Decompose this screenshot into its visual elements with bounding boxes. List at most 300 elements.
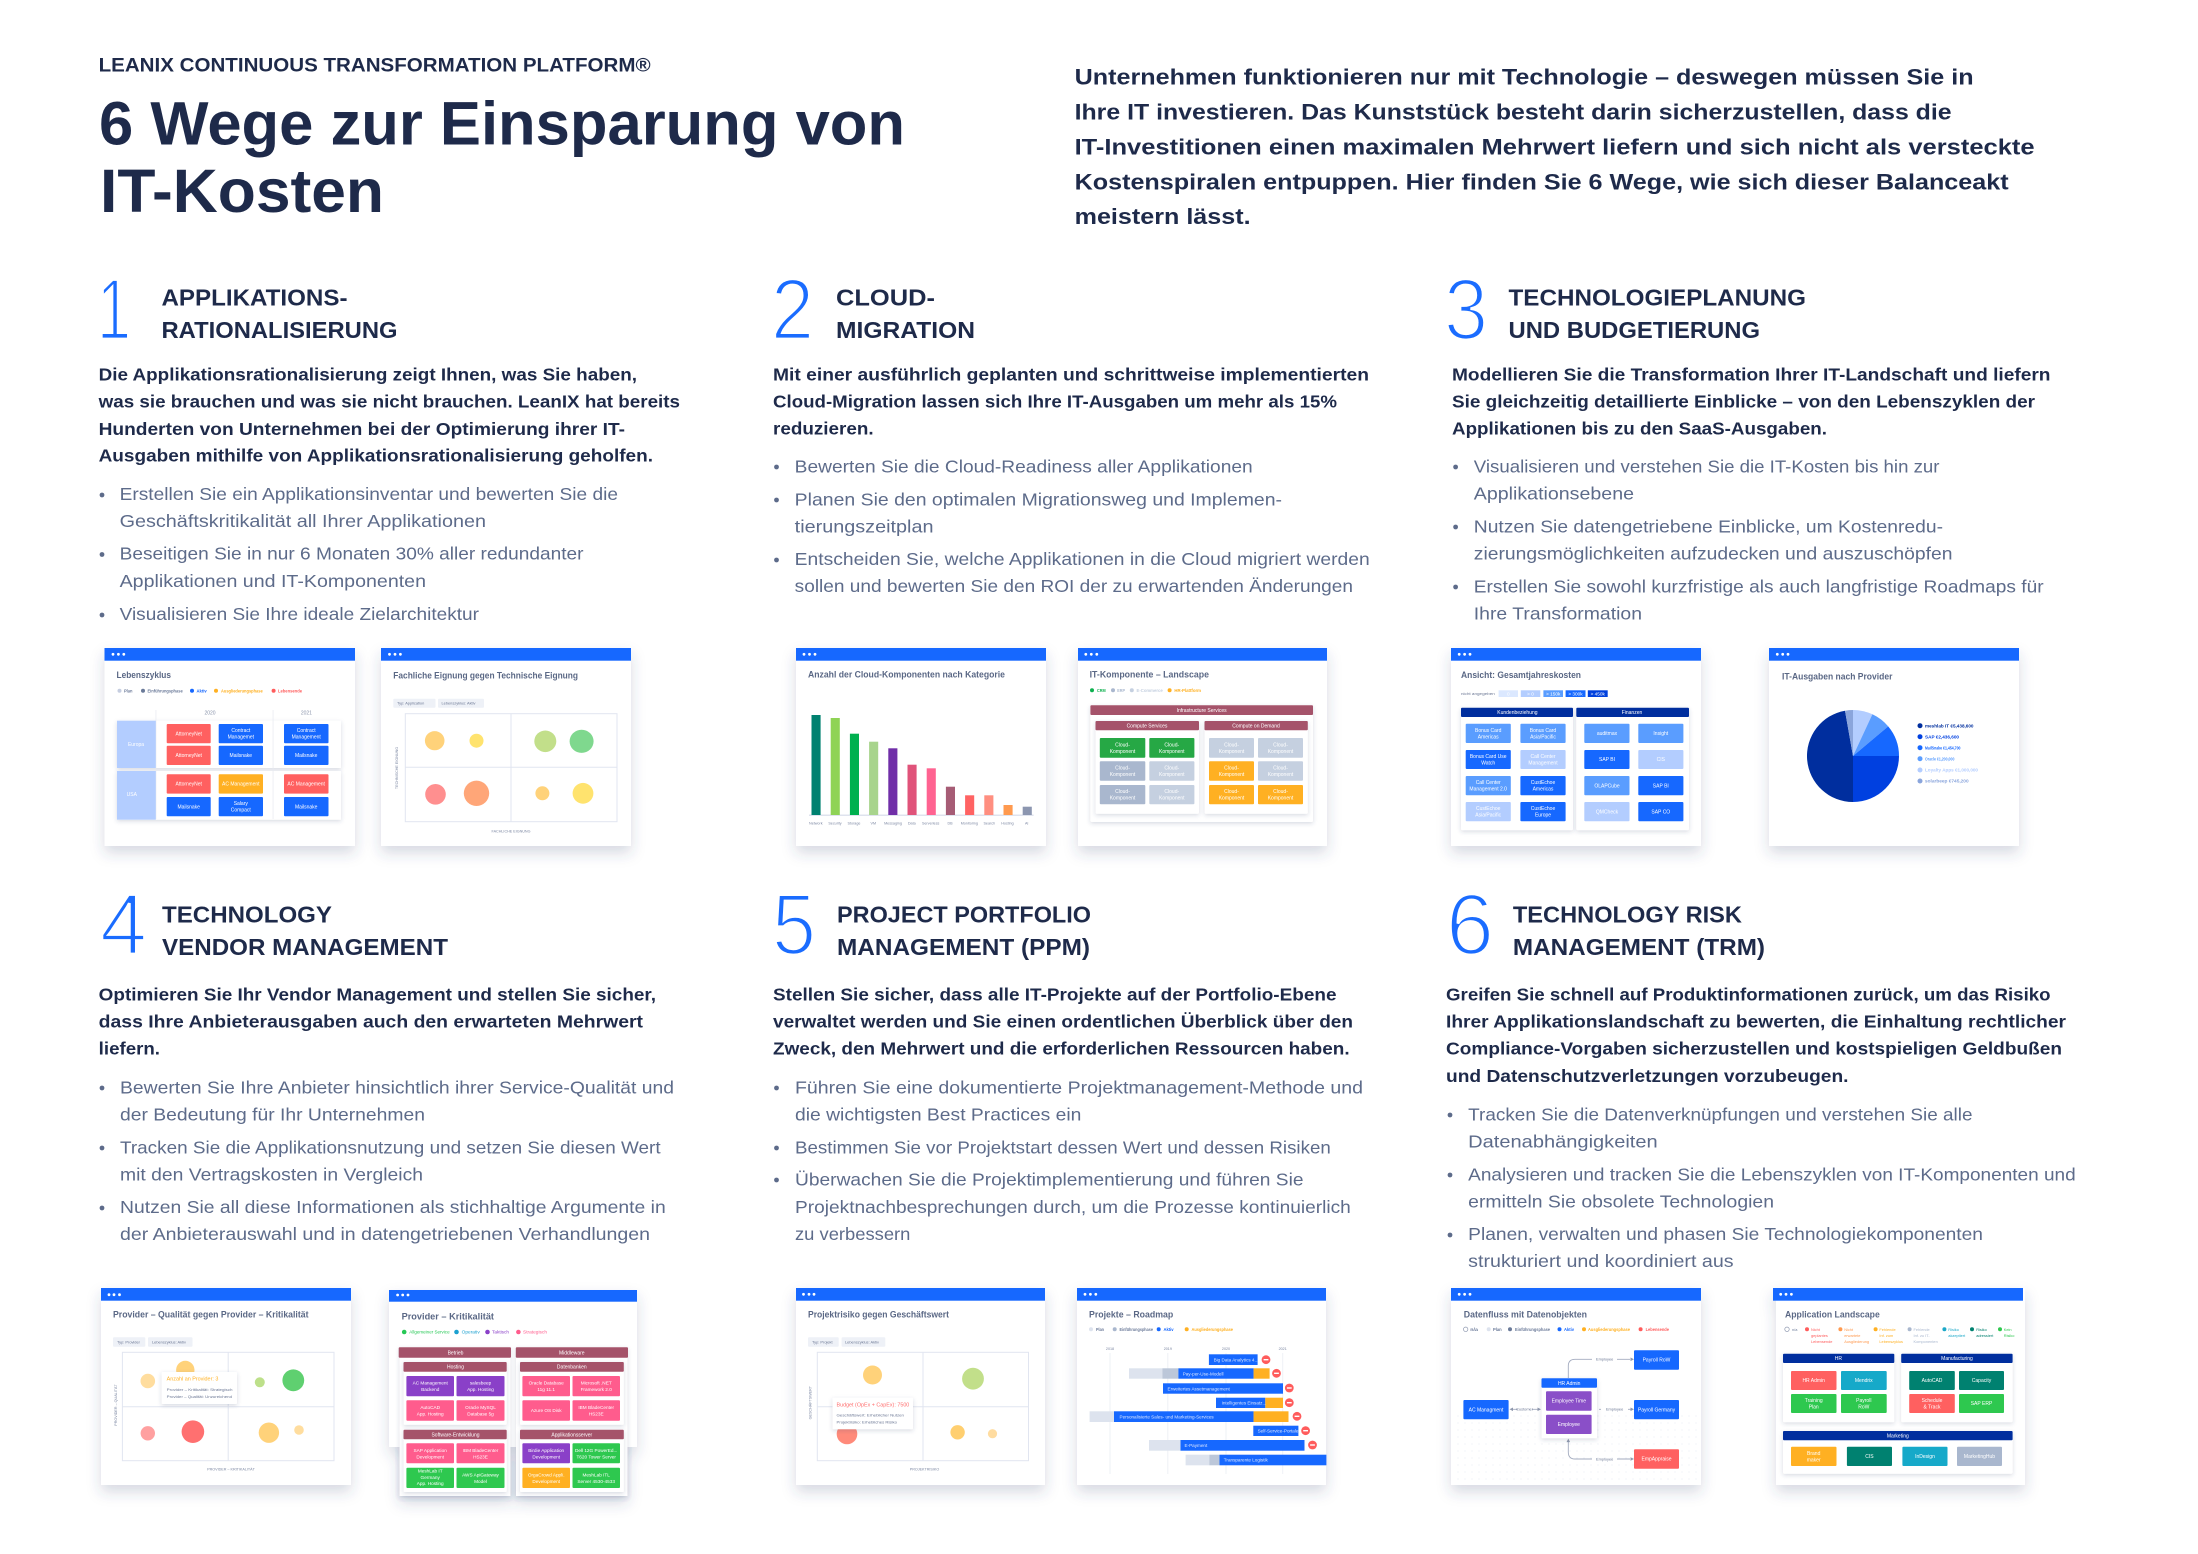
heading 1 [162,284,398,343]
panel: HR: Training [1805,1398,1823,1404]
legend: Risiko [1948,1327,1959,1332]
legend: Lebensende [278,688,302,693]
bullet list 2: Planen Sie den optimalen Migrationsweg und Implemen- [795,490,1282,510]
legend: geplantes [1811,1333,1828,1338]
dotted backdrop [1455,1415,1697,1481]
card: Projekte Roadmap [1077,1288,1326,1485]
card: Gesamtjahreskosten [1451,648,1701,846]
lifecycle table: 2021 [301,711,312,717]
panel: Betrieb: Betrieb [448,1350,464,1356]
lifecycle table: AttorneyNet [175,782,203,788]
card: Fachliche Eignung [381,648,631,846]
cost legend: > 150k [1546,691,1561,696]
panel: Manufacturing: SAP ERP [1971,1401,1993,1407]
lifecycle table: AC Management [287,782,326,788]
heading 4 [162,901,448,960]
gantt chart: Big Data Analytics 4... [1214,1358,1258,1362]
tooltip [162,1372,237,1404]
number 1: 1 [97,262,131,358]
legend [1089,1327,1233,1332]
data flow diagram: Customer [1516,1407,1534,1412]
number 4: 4 [100,877,147,973]
gantt chart: 2021 [1279,1347,1287,1351]
capability map: Cloud- [1224,789,1239,795]
capability map: Komponent [1268,796,1294,802]
capability map: Komponent [1219,796,1245,802]
panel: Middleware: Azure OS Disk [531,1408,562,1413]
card title: Provider – Qualität gegen Provider – Kritikalität [113,1309,309,1320]
legend: Komponenten [1914,1339,1938,1344]
data flow diagram: Payroll RoW [1643,1358,1671,1364]
data flow diagram: AC Managment [1469,1407,1504,1413]
panel: Betrieb: AutoCAD [420,1405,441,1410]
data flow diagram: Employee [1596,1357,1613,1362]
tooltip: Provider – Qualität: Unzureichend [167,1394,232,1399]
heading 3: UND BUDGETIERUNG [1508,317,1760,343]
lead text 3 [1452,364,2050,439]
panel: Betrieb [399,1347,511,1496]
bullet list 3: Nutzen Sie datengetriebene Einblicke, um Kostenredu- [1474,516,1943,536]
legend: Lebensende [1646,1327,1669,1332]
legend: Plan [1493,1327,1502,1332]
gantt chart: 2020 [1222,1347,1230,1351]
lead text 6: Ihrer Applikationslandschaft zu bewerten, die Einhaltung rechtlicher [1446,1011,2066,1031]
heat map: auditmax [1597,731,1618,737]
legend: Ausgliederung [1844,1339,1869,1344]
bullet list 6: Tracken Sie die Datenverknüpfungen und verstehen Sie alle [1468,1104,1972,1124]
panel: Middleware: Datenbanken [557,1365,587,1371]
bullet list 2: tierungszeitplan [795,517,934,537]
pie chart [1807,710,1899,802]
bullet list 5: die wichtigsten Best Practices ein [795,1104,1081,1124]
lifecycle table: Mailsnake [230,753,252,759]
panel: HR: Mendrix [1855,1378,1873,1384]
lifecycle table: 2020 [204,711,216,717]
bar chart: Hosting [1001,821,1014,825]
lead text 2: Cloud-Migration lassen sich Ihre IT-Ausgaben um mehr als 15% [773,392,1337,412]
panel: Betrieb: AC Management [413,1380,448,1386]
card: Provider Qualität gegen Kritikalität [101,1288,351,1485]
card title: Application Landscape [1785,1309,1880,1320]
heat map: Management 2.0 [1469,787,1507,793]
legend: Strategisch [523,1330,547,1335]
pie legend: solarbeep €745,200 [1925,779,1969,784]
bar chart: Network [809,821,823,825]
capability map: Cloud- [1273,766,1288,772]
panel: Middleware: Oracle Database [529,1380,564,1386]
panel: Marketing: Marketing [1887,1434,1909,1440]
panel: Middleware: T620 Tower Server [576,1454,616,1459]
bullet list 5: Bestimmen Sie vor Projektstart dessen Wert und dessen Risiken [795,1137,1331,1157]
legend: E-Commerce [1136,688,1163,693]
capability map: Cloud- [1115,789,1130,795]
heat map: Watch [1481,760,1495,766]
heat map: Americas [1533,787,1554,793]
bubble matrix [114,1352,334,1471]
bullet list 4: Tracken Sie die Applikationsnutzung und setzen Sie diesen Wert [120,1137,661,1157]
data flow diagram: Employee Time [1552,1399,1586,1405]
heading 4: VENDOR MANAGEMENT [162,934,448,960]
lifecycle table: AttorneyNet [175,753,203,759]
tooltip: Anzahl an Provider: 3 [167,1376,219,1382]
panel: Betrieb: Software-Entwicklung [431,1432,480,1438]
gantt chart: Intelligentes Einsatz... [1222,1401,1266,1406]
bullet list 4: der Bedeutung für Ihr Unternehmen [120,1104,425,1124]
bar chart: Storage [848,821,860,825]
cost legend: > 450k [1591,691,1605,696]
filter chips: Typ: Projekt [812,1340,833,1344]
panel: Betrieb: Germany [421,1475,440,1480]
lead text 6: und Datenschutzverletzungen vorzubeugen. [1446,1066,1848,1086]
panel: Betrieb: App. Hosting [417,1481,444,1486]
gantt chart: Pay-per-Use-Modell [1183,1371,1224,1376]
panel: Manufacturing: & Track [1924,1404,1941,1410]
cost legend: > 300k [1568,691,1583,696]
heat map: Management [1528,760,1558,766]
legend: Inf. zu IT- [1914,1333,1930,1338]
legend: Ausgliederungsphase [1192,1327,1233,1332]
bullet list 1: Beseitigen Sie in nur 6 Monaten 30% aller redundanter [120,544,584,564]
legend: Kein [2004,1327,2012,1332]
data flow diagram: HR Admin [1558,1381,1581,1387]
bubble matrix: PROVIDER – KRITIKALITÄT [207,1467,256,1471]
bullet list 6: Analysieren und tracken Sie die Lebenszyklen von IT-Komponenten und [1468,1164,2076,1184]
card title: Provider – Kritikalität [402,1311,495,1322]
lead text 3: Applikationen bis zu den SaaS-Ausgaben. [1452,419,1827,439]
panel: Manufacturing [1901,1354,2013,1422]
bubble matrix: PROVIDER – QUALITÄT [114,1384,118,1426]
lifecycle table: Mailsnake [295,753,318,759]
bar chart: Security [828,821,842,825]
panel: Middleware: Dell 12G PowerEd... [575,1448,617,1453]
bar chart: Messaging [884,821,902,825]
panel: Middleware: Development [532,1479,561,1484]
heading 6: TECHNOLOGY RISK [1513,901,1742,927]
bar chart: Serverless [922,821,940,825]
bar chart: Data [908,821,917,825]
lead text 5: Stellen Sie sicher, dass alle IT-Projekte auf der Portfolio-Ebene [773,984,1337,1004]
lead text 1: Ausgaben mithilfe von Applikationsrationalisierung geholfen. [99,446,653,466]
panel: Betrieb: Model [474,1479,487,1484]
legend: Ausgliederungsphase [1588,1327,1630,1332]
panel: Betrieb: App. Hosting [417,1412,444,1416]
legend: CRM [1097,688,1106,693]
heading 5: MANAGEMENT (PPM) [837,934,1090,960]
panel: Betrieb: Hosting [447,1365,464,1371]
bar chart: Search [983,821,995,825]
bullet list 1 [100,484,618,624]
lead text 1 [98,364,680,466]
heat map: Bonus Card [1475,728,1502,734]
lead text 5 [773,984,1353,1059]
lead text 4: dass Ihre Anbieterausgaben auch den erwarteten Mehrwert [99,1011,643,1031]
lifecycle table: Compact [231,808,251,814]
section 5: Project Portfolio Management [772,877,1363,1244]
heat map: Bonus Card [1530,728,1556,734]
bullet list 3: Visualisieren und verstehen Sie die IT-Kosten bis hin zur [1474,457,1940,477]
heading 4: TECHNOLOGY [162,901,332,927]
bullet list 6: strukturiert und koordiniert aus [1468,1251,1734,1271]
gantt chart: Transparente Logistik [1224,1458,1269,1463]
card: Projektrisiko [796,1288,1045,1485]
legend: adressiert [1976,1333,1994,1338]
bullet list 1: Visualisieren Sie Ihre ideale Zielarchitektur [120,604,479,624]
capability map: Cloud- [1224,742,1239,748]
gantt chart: Personalisierte Sales- und Marketing-Services [1120,1414,1214,1419]
tooltip: Projektrisiko: Erhebliches Risiko [836,1420,897,1425]
legend: Taktisch [492,1330,509,1335]
panel: Manufacturing: AutoCAD [1922,1378,1943,1384]
heat map: CustEchoe [1476,806,1501,812]
panel: Betrieb: SAP Application [414,1448,447,1453]
heading 6 [1513,901,1765,960]
bar chart: VM [871,821,876,825]
number 5: 5 [772,877,816,973]
legend: Einführungsphase [148,688,183,693]
capability map: Komponent [1268,749,1294,755]
gantt chart: Erweitertes Assetmanagement [1168,1386,1231,1391]
heat map: Call Center [1476,780,1501,786]
panel: Marketing: CIS [1865,1454,1874,1460]
cost legend [1461,690,1608,697]
bullet list 1: Geschäftskritikalität all Ihrer Applikationen [120,511,486,531]
intro text: Unternehmen funktionieren nur mit Technologie – deswegen müssen Sie in [1075,65,1974,90]
legend: Risiko [1976,1327,1987,1332]
legend: Operativ [462,1330,481,1335]
legend: Aktiv [1564,1327,1574,1332]
number 6: 6 [1446,877,1494,973]
panel: Middleware: Microsoft .NET [581,1380,612,1386]
bar chart [809,715,1034,825]
heat map: SAP CO [1651,809,1670,815]
panel: Betrieb: Backend [421,1387,440,1392]
legend: erwartete [1844,1333,1860,1338]
panel: Middleware: Birdie Application [528,1448,565,1453]
heat map: SAP BI [1653,783,1669,789]
lifecycle table: AC Management [222,782,260,788]
card title: IT-Ausgaben nach Provider [1782,671,1893,682]
title: 6 Wege zur Einsparung von [99,90,905,158]
filter chips: Lebenszyklus: Aktiv [152,1340,186,1344]
heat map: Call Center [1530,754,1556,760]
card: Provider Kritikalität [389,1290,637,1496]
lead text 3: Modellieren Sie die Transformation Ihrer IT-Landschaft und liefern [1452,364,2050,384]
legend: Einführungsphase [1120,1327,1153,1332]
heat map: CustEchoe [1531,806,1555,812]
bullet list 4: der Anbieterauswahl und in datengetriebenen Verhandlungen [120,1224,650,1244]
kicker: LEANIX CONTINUOUS TRANSFORMATION PLATFORM® [99,55,651,76]
gantt chart: 2018 [1106,1347,1114,1351]
panel: Middleware: Applikationsserver [551,1432,593,1438]
panel: HR: HR [1835,1356,1842,1362]
filter chips: Lebenszyklus: Aktiv [845,1340,879,1344]
panel: HR: Plan [1809,1404,1819,1410]
heat map: OLAPCube [1594,783,1620,789]
capability map: Komponent [1159,796,1185,802]
bullet list 5: Projektnachbesprechungen durch, um die Prozesse kontinuierlich [795,1197,1351,1217]
bar chart: AI [1025,821,1028,825]
bullet list 1: Applikationen und IT-Komponenten [120,571,426,591]
filter chips [113,1337,192,1347]
capability map: Komponent [1110,796,1136,802]
lead text 5: verwaltet werden und Sie einen ordentlichen Überblick über den [773,1011,1353,1031]
bar chart: Monitoring [961,821,978,825]
heat map: Kundenbeziehung [1497,710,1538,716]
legend: ERP [1117,688,1125,693]
heading 5: PROJECT PORTFOLIO [837,901,1091,927]
card: IT-Ausgaben [1769,648,2019,846]
legend: HR-Plattform [1174,688,1201,693]
bullet list 2: sollen und bewerten Sie den ROI der zu erwartenden Änderungen [795,576,1353,596]
heat map: Asia/Pacific [1530,734,1556,740]
panel: Betrieb: MeshLab IT [418,1469,443,1474]
panel: Betrieb: Oracle MySQL [465,1405,496,1410]
bullet list 5: Überwachen Sie die Projektimplementierung und führen Sie [795,1170,1304,1190]
data flow diagram: Employee [1596,1456,1613,1461]
panel: Middleware: HS23E [589,1412,604,1416]
heat map: Insight [1653,731,1669,737]
intro text: IT-Investitionen einen maximalen Mehrwert liefern und sich nicht als versteckte [1075,134,2035,160]
legend [1464,1327,1669,1332]
heading 1: RATIONALISIERUNG [162,317,398,343]
legend: Aktiv [196,688,207,693]
lifecycle table: Contract [231,728,251,734]
bullet list 4: Bewerten Sie Ihre Anbieter hinsichtlich ihrer Service-Qualität und [120,1077,674,1097]
filter chips [393,699,484,708]
panel: Betrieb: App. Hosting [467,1387,494,1392]
panel: Manufacturing: Manufacturing [1941,1356,1973,1362]
section 2: Cloud-Migration [771,262,1370,596]
tooltip: Budget (OpEx + CapEx): 7500 [836,1402,909,1408]
bubble matrix: PROJEKTRISIKO [910,1467,939,1471]
capability map: Cloud- [1115,766,1130,772]
lead text 1: Die Applikationsrationalisierung zeigt Ihnen, was Sie haben, [99,364,637,384]
heading 1: APPLIKATIONS- [162,284,348,310]
card: Lebenszyklus [104,648,355,846]
card title: Fachliche Eignung gegen Technische Eignung [393,670,578,681]
legend: Nicht [1844,1327,1854,1332]
legend: Fehlende [1914,1327,1930,1332]
bullet list 6 [1448,1104,2076,1271]
heat map: Asia/Pacific [1475,813,1502,819]
capability map: Komponent [1110,772,1136,778]
heading 2: MIGRATION [836,317,975,343]
panel: Middleware: Framework 2.0 [581,1387,612,1392]
lifecycle table: Management [292,735,321,741]
heat map [1461,708,1689,830]
filter chips: Typ: Provider [117,1340,141,1344]
capability map: Komponent [1219,749,1245,755]
bullet list 2 [774,457,1370,596]
legend: Plan [124,688,133,693]
lead text 6 [1446,984,2066,1086]
lead text 2: Mit einer ausführlich geplanten und schrittweise implementierten [773,364,1369,384]
bullet list 4 [100,1077,674,1244]
card: Datenfluss [1451,1288,1701,1485]
bubble matrix: TECHNISCHE EIGNUNG [395,747,399,789]
legend: akzeptiert [1948,1333,1966,1338]
bullet list 3 [1453,457,2044,623]
lead text 4 [99,984,656,1059]
pie legend: MailSnake €1,454,700 [1925,745,1961,750]
filter chips [808,1337,885,1347]
lead text 1: was sie brauchen und was sie nicht brauchen. LeanIX hat bereits [98,392,680,412]
panel: Betrieb: IBM BladeCenter [463,1448,499,1453]
legend [402,1330,547,1335]
bullet list 1: Erstellen Sie ein Applikationsinventar und bewerten Sie die [120,484,618,504]
legend: Aktiv [1164,1327,1174,1332]
legend: Nicht [1811,1327,1821,1332]
capability map: Komponent [1268,772,1294,778]
panel: Middleware: MeshLab ITL [583,1472,610,1477]
card title: Ansicht: Gesamtjahreskosten [1461,670,1581,681]
cost legend: 0 [1507,691,1510,696]
legend [118,688,302,693]
bullet list 5: zu verbessern [795,1224,910,1244]
legend: Risiko [2004,1333,2014,1338]
bullet list 4: mit den Vertragskosten in Vergleich [120,1164,423,1184]
gantt chart [1090,1347,1326,1474]
bar chart: DB [947,821,953,825]
pie legend: Oracle €1,200,000 [1925,756,1955,761]
lead text 6: Greifen Sie schnell auf Produktinformationen zurück, um das Risiko [1446,984,2051,1004]
intro text [1075,65,2035,229]
heat map: CustEchoe [1531,780,1555,786]
capability map: Komponent [1159,749,1185,755]
capability map: Cloud- [1273,742,1288,748]
bullet list 3: Ihre Transformation [1474,603,1642,623]
heat map: Americas [1478,734,1499,740]
legend [1785,1327,2014,1344]
data flow diagram: Employee [1606,1407,1623,1412]
bubble matrix [395,714,617,834]
capability map: Cloud- [1224,766,1239,772]
gantt chart: E-Payment [1184,1443,1208,1448]
intro text: Kostenspiralen entpuppen. Hier finden Sie 6 Wege, wie sich dieser Balanceakt [1075,170,2009,194]
legend: n/a [1792,1327,1798,1332]
pie legend: SAP €2,436,600 [1925,734,1959,739]
bullet list 6: Planen, verwalten und phasen Sie Technologiekomponenten [1468,1224,1983,1244]
heading 3 [1508,284,1806,343]
panel: Middleware: Server 4530-4533 [577,1479,615,1484]
panel: Marketing: MarketingHub [1964,1454,1995,1460]
lead text 4: Optimieren Sie Ihr Vendor Management und stellen Sie sicher, [99,984,656,1004]
bubble matrix [808,1352,1028,1471]
heading 3: TECHNOLOGIEPLANUNG [1508,284,1806,310]
bullet list 5: Führen Sie eine dokumentierte Projektmanagement-Methode und [795,1077,1363,1097]
lifecycle table: Contract [297,728,316,734]
panel: HR: RoW [1858,1404,1870,1410]
card title: Datenfluss mit Datenobjekten [1464,1309,1587,1320]
data flow diagram [1463,1350,1679,1469]
title [99,90,905,225]
card title: Projekte – Roadmap [1089,1309,1173,1320]
lead text 6: Compliance-Vorgaben sicherzustellen und kostspieligen Geldbußen [1446,1039,2062,1059]
legend: Allgemeiner Service [409,1330,450,1335]
panel: Betrieb: salesbeep [470,1380,492,1386]
lead text 5: Zweck, den Mehrwert und die erforderlichen Ressourcen haben. [773,1039,1350,1059]
card title: Projektrisiko gegen Geschäftswert [808,1309,950,1320]
capability map: Komponent [1159,772,1185,778]
bullet list 2: Entscheiden Sie, welche Applikationen in die Cloud migriert werden [795,549,1370,569]
legend: Ausgliederungsphase [221,688,263,693]
heat map: Finanzen [1622,710,1642,716]
bullet list 2: Bewerten Sie die Cloud-Readiness aller Applikationen [795,457,1253,477]
lead text 1: Hunderten von Unternehmen bei der Optimierung ihrer IT- [99,419,625,439]
section 4: Vendor Management [99,877,674,1244]
bullet list 3: Erstellen Sie sowohl kurzfristige als auch langfristige Roadmaps für [1474,576,2044,596]
card title: IT-Komponente – Landscape [1090,669,1209,680]
